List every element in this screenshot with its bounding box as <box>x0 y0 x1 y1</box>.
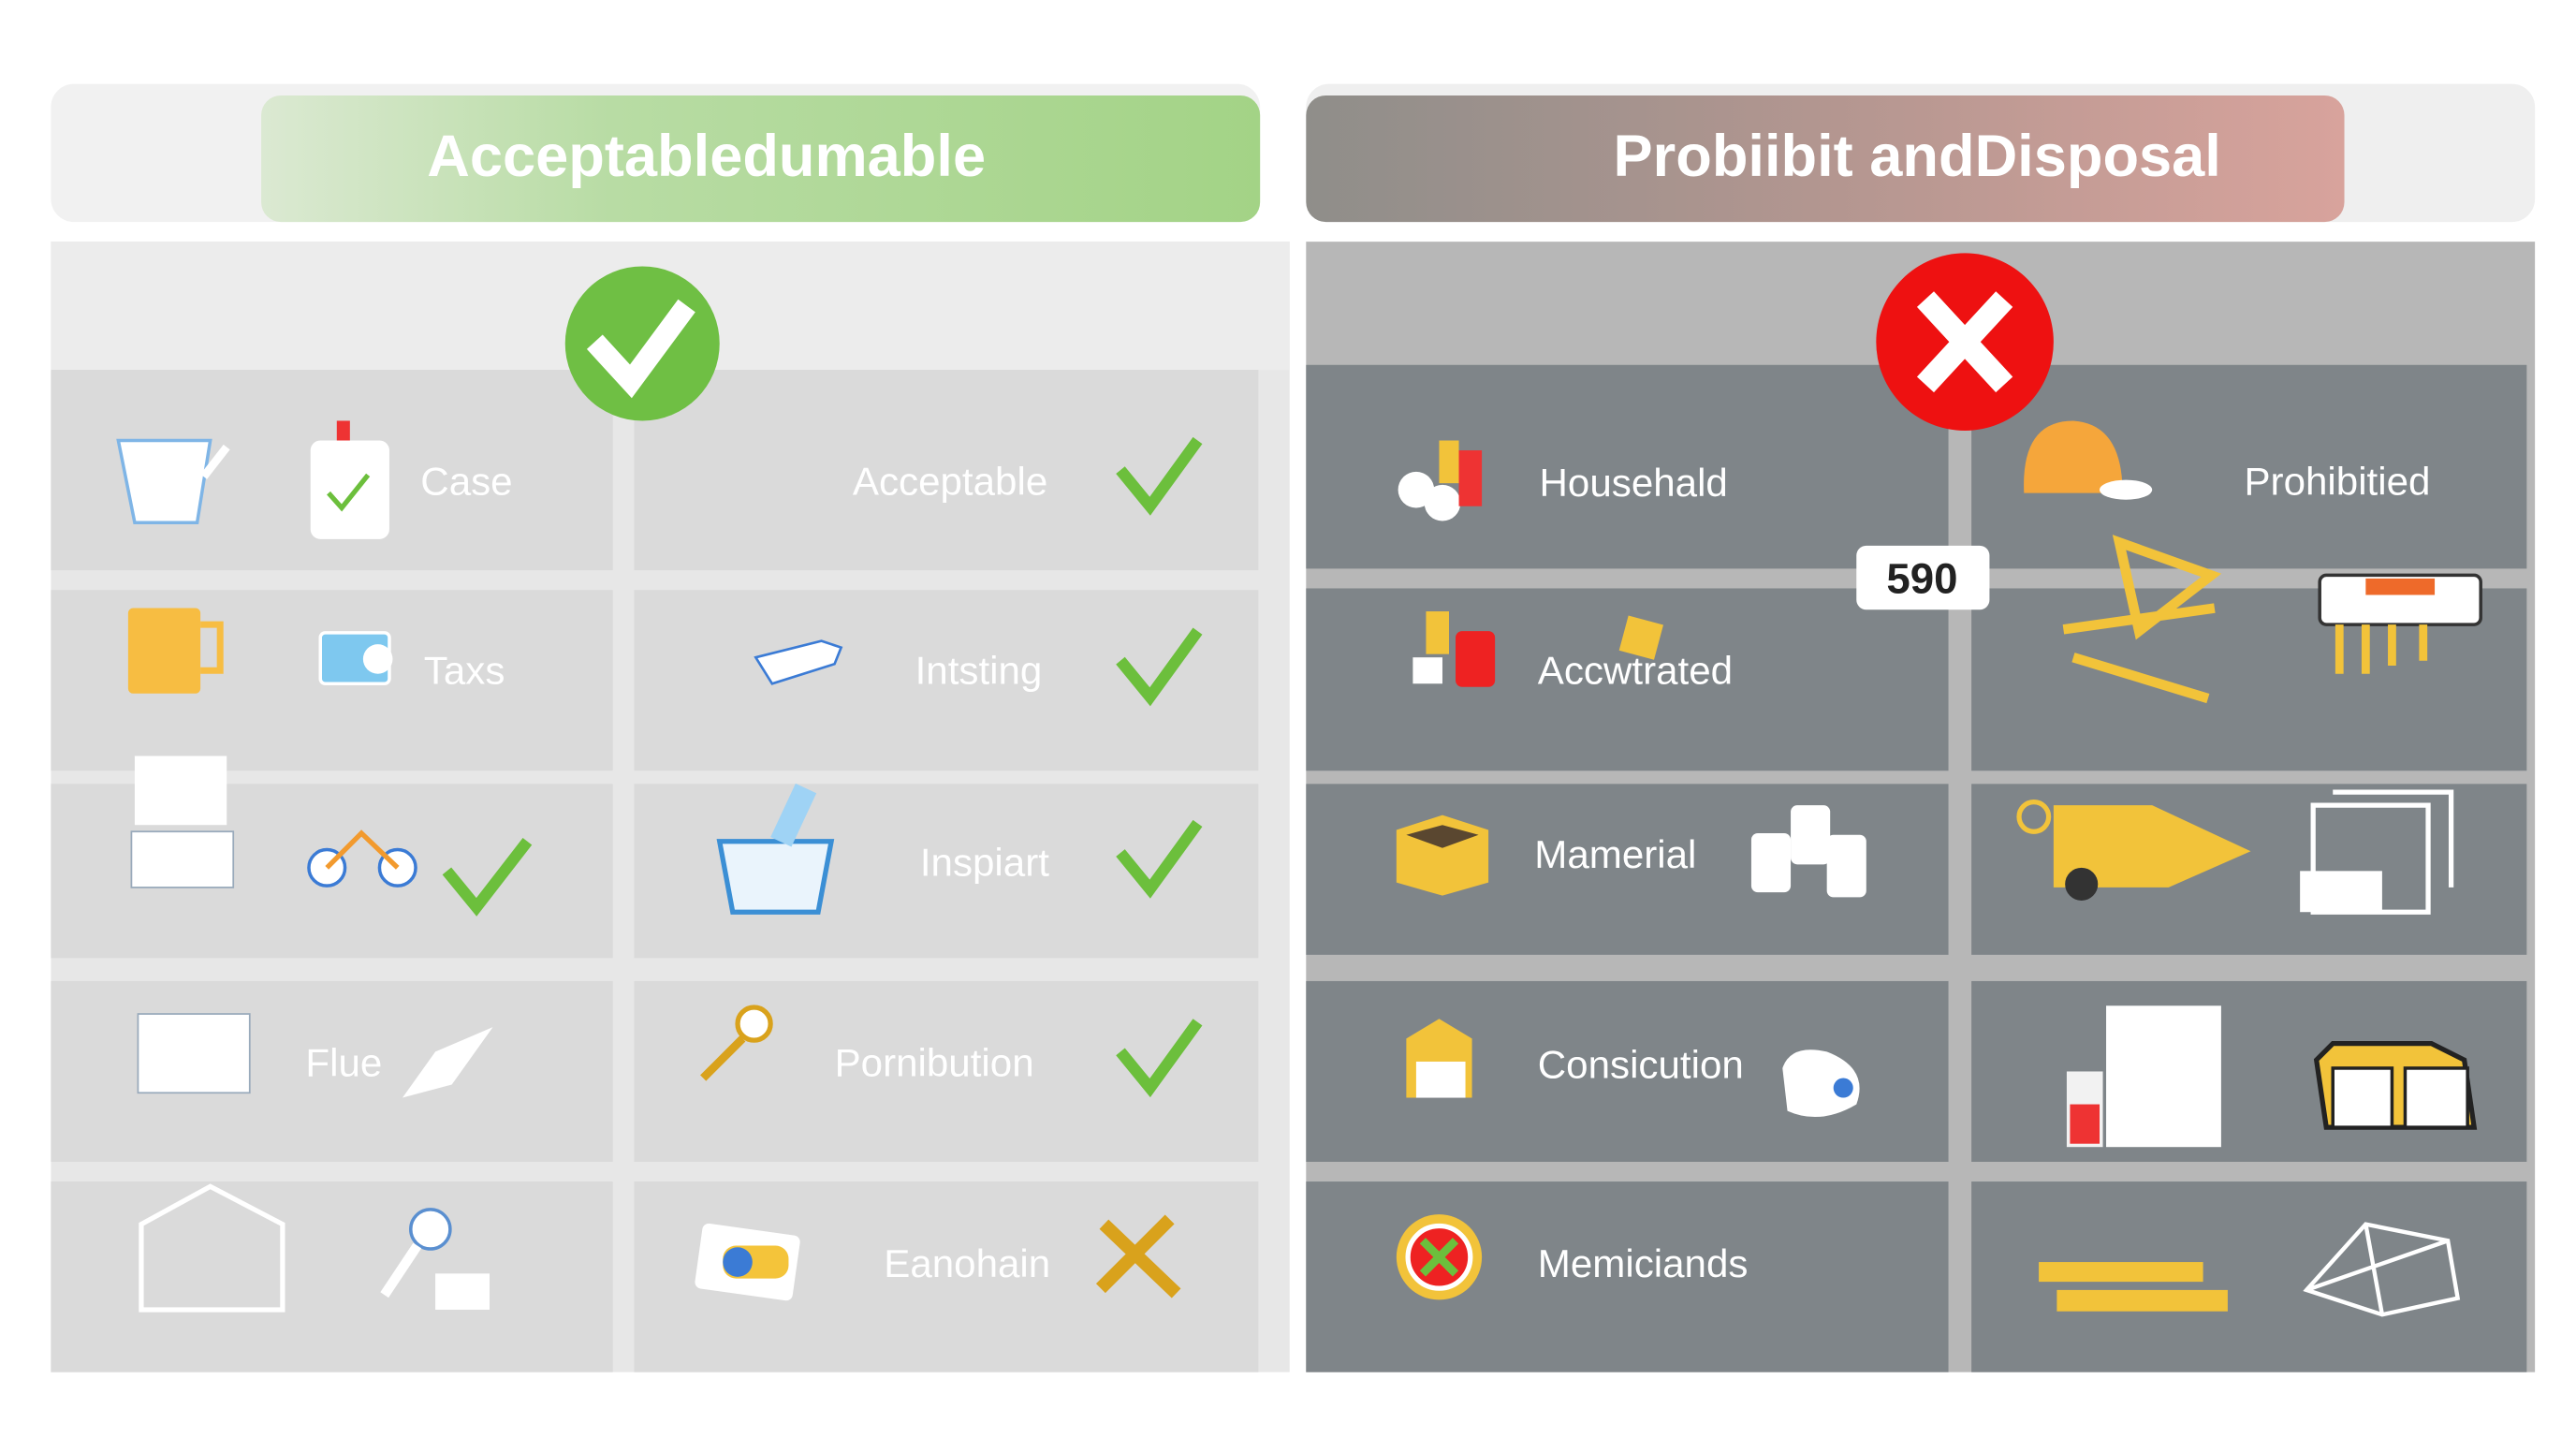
labels: prohibited column: Accwtrated <box>1538 648 1733 692</box>
labels: acceptable column: Case <box>420 459 513 503</box>
header: acceptable <box>51 84 1260 222</box>
labels: acceptable column <box>305 459 1050 1285</box>
labels: acceptable column: Acceptable <box>853 459 1047 503</box>
labels: prohibited column <box>1534 459 2430 1285</box>
labels: acceptable column: Pornibution <box>835 1041 1034 1085</box>
labels: prohibited column: Consicution <box>1538 1042 1744 1086</box>
labels: acceptable column: Flue <box>305 1041 382 1085</box>
checkmarks <box>446 441 1197 1088</box>
labels: acceptable column: Taxs <box>424 648 505 692</box>
labels: prohibited column: Househald <box>1540 461 1728 505</box>
panel: acceptable items <box>51 242 1290 1372</box>
icon: green check circle <box>565 266 720 420</box>
header: acceptable: Acceptabledumable <box>427 124 986 189</box>
icons: acceptable <box>118 420 1177 1310</box>
badge: 590: 590 <box>1886 555 1958 603</box>
labels: acceptable column: Inspiart <box>920 841 1049 885</box>
badge: 590 <box>1856 546 1989 609</box>
labels: prohibited column: Memiciands <box>1538 1241 1748 1285</box>
labels: acceptable column: Intsting <box>915 648 1042 692</box>
header: prohibited <box>1306 84 2535 222</box>
icon: red x circle <box>1876 253 2054 431</box>
labels: prohibited column: Mamerial <box>1534 832 1696 876</box>
icons: prohibited <box>1397 420 2481 1314</box>
panel: prohibited items <box>1306 242 2535 1372</box>
labels: acceptable column: Eanohain <box>884 1241 1050 1285</box>
labels: prohibited column: Prohibitied <box>2244 459 2430 503</box>
header: prohibited: Probiibit andDisposal <box>1614 124 2221 189</box>
